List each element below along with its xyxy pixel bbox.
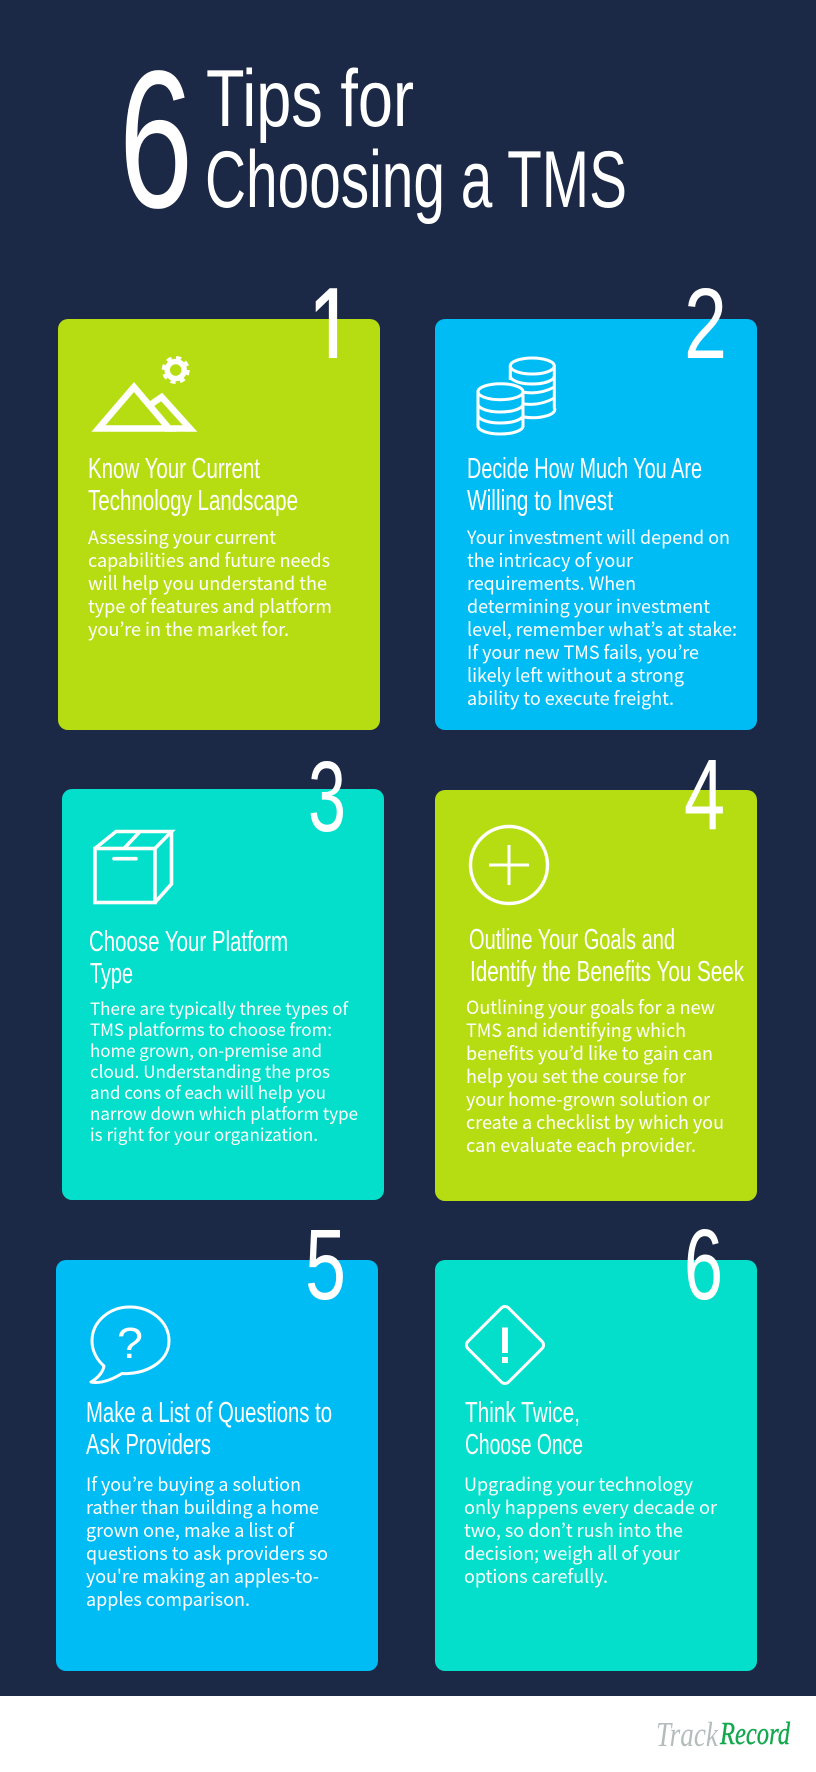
heading [88, 453, 298, 517]
title: 6 [119, 30, 193, 249]
body text: If your new TMS fails, you’re [467, 638, 699, 665]
body text: you’re in the market for. [88, 615, 289, 642]
body text: There are typically three types of [90, 995, 349, 1020]
body text: TMS and identifying which [466, 1016, 686, 1043]
panel: tip 5 [56, 1209, 378, 1671]
heading [469, 924, 744, 988]
body text: decision; weigh all of your [464, 1539, 681, 1566]
panel: tip 6 [435, 1209, 757, 1671]
heading: Outline Your Goals and [469, 924, 675, 956]
heading [86, 1397, 332, 1461]
body text: and cons of each will help you [90, 1079, 326, 1104]
body text: ability to execute freight. [467, 684, 674, 711]
body text: narrow down which platform type [90, 1100, 358, 1125]
logo: Track Record: Track [656, 1715, 719, 1754]
panel: tip 4 [435, 739, 757, 1201]
heading: Choose Once [465, 1429, 583, 1461]
body text [90, 995, 358, 1146]
icon: coin stacks [478, 358, 555, 434]
body text: grown one, make a list of [86, 1516, 295, 1543]
icon: warning diamond [464, 1304, 546, 1386]
body text: likely left without a strong [467, 661, 684, 688]
icon: question speech bubble: ? [117, 1319, 143, 1368]
logo: Track Record: Record [719, 1715, 791, 1751]
logo: Track Record [656, 1715, 791, 1754]
body text: help you set the course for [466, 1062, 687, 1089]
body text [464, 1470, 718, 1589]
title: Tips for [206, 54, 414, 144]
body text: Your investment will depend on [466, 523, 730, 550]
body text: level, remember what’s at stake: [467, 615, 737, 642]
icon: mountains and gear [98, 358, 190, 428]
number 4: 4 [684, 739, 725, 851]
heading [89, 926, 288, 990]
icon: question speech bubble [91, 1307, 169, 1382]
heading: Make a List of Questions to [86, 1397, 332, 1429]
heading: Decide How Much You Are [467, 453, 702, 485]
body text: Upgrading your technology [464, 1470, 693, 1497]
body text: you're making an apples-to- [86, 1562, 319, 1589]
body text: the intricacy of your [467, 546, 634, 573]
heading: Choose Your Platform [89, 926, 288, 958]
icon: plus circle [470, 826, 548, 904]
body text: will help you understand the [88, 569, 327, 596]
number 1: 1 [308, 265, 355, 393]
panel: tip 1 [58, 265, 380, 730]
heading [467, 453, 702, 517]
body text: If you’re buying a solution [86, 1470, 301, 1497]
footer band [0, 1696, 816, 1772]
panel: tip 3 [62, 741, 384, 1200]
body text: only happens every decade or [464, 1493, 718, 1520]
body text: your home-grown solution or [466, 1085, 711, 1112]
body text: cloud. Understanding the pros [90, 1058, 330, 1083]
body text [466, 523, 737, 711]
body text: type of features and platform [88, 592, 332, 619]
body text [86, 1470, 328, 1612]
heading: Think Twice, [465, 1397, 580, 1429]
body text: Outlining your goals for a new [466, 993, 715, 1020]
title [119, 30, 627, 249]
icon: box [95, 832, 172, 902]
body text: apples comparison. [86, 1585, 250, 1612]
body text: requirements. When [467, 569, 636, 596]
body text: Assessing your current [88, 523, 276, 550]
body text: can evaluate each provider. [466, 1131, 696, 1158]
title: Choosing a TMS [205, 135, 627, 225]
body text [88, 523, 332, 642]
heading: Type [90, 958, 133, 990]
body text [466, 993, 724, 1158]
heading: Know Your Current [88, 453, 260, 485]
body text: rather than building a home [86, 1493, 319, 1520]
number 2: 2 [684, 268, 727, 380]
body text: two, so don’t rush into the [464, 1516, 683, 1543]
body text: home grown, on-premise and [90, 1037, 322, 1062]
body text: TMS platforms to choose from: [90, 1016, 332, 1041]
heading [465, 1397, 583, 1461]
body text: options carefully. [464, 1562, 608, 1589]
body text: is right for your organization. [90, 1121, 318, 1146]
heading: Ask Providers [86, 1429, 211, 1461]
heading: Willing to Invest [467, 485, 613, 517]
number 5: 5 [305, 1209, 346, 1321]
heading: Technology Landscape [88, 485, 298, 517]
body text: create a checklist by which you [466, 1108, 724, 1135]
number 3: 3 [308, 741, 346, 853]
number 6: 6 [684, 1209, 723, 1321]
body text: benefits you’d like to gain can [466, 1039, 713, 1066]
panel: tip 2 [435, 268, 757, 730]
body text: questions to ask providers so [86, 1539, 328, 1566]
body text: capabilities and future needs [88, 546, 330, 573]
body text: determining your investment [467, 592, 710, 619]
